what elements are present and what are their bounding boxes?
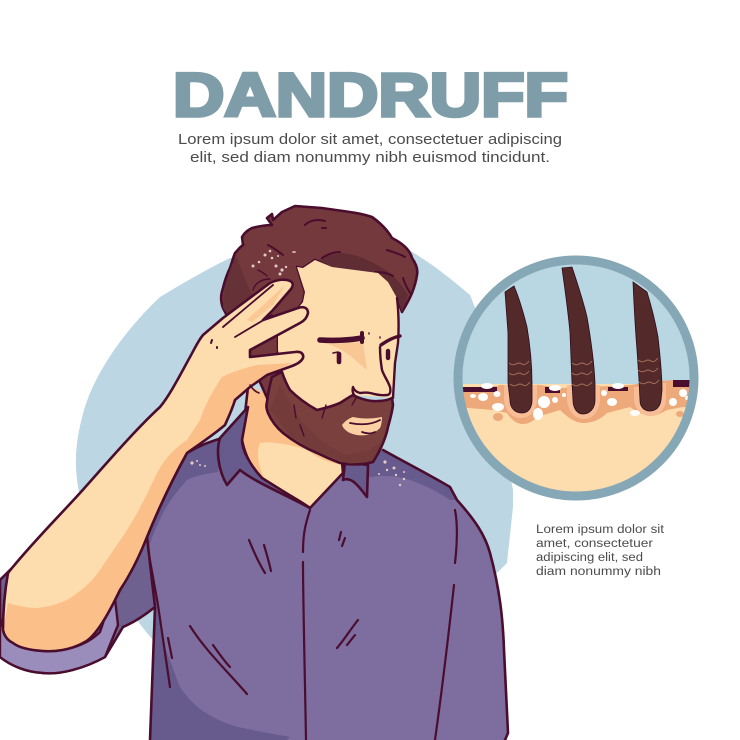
subtitle: Lorem ipsum dolor sit amet, consectetuer adipiscing [178,132,562,148]
caption text: diam nonummy nibh [536,566,661,578]
caption text: adipiscing elit, sed [536,552,643,564]
left collar [218,407,310,508]
nose [353,347,390,396]
skin layers [462,384,686,492]
face [278,260,399,410]
background blob [76,247,513,640]
subtitle [178,132,562,166]
dandruff flakes [190,250,405,486]
hair strand lines [253,220,410,293]
rolled sleeve [0,537,155,673]
hair [221,206,417,400]
beard stubble marks [294,398,356,436]
magnified scalp circle [450,260,700,504]
follicle light rims [504,383,666,419]
subtitle: elit, sed diam nonummy nibh euismod tincidunt. [190,150,550,166]
brows and eyes [320,333,400,362]
caption text [536,524,665,578]
neck [242,385,345,508]
placket and folds [149,510,457,740]
beard [266,372,393,464]
raised arm and hand [3,280,308,651]
hair shafts [505,267,662,414]
man with dandruff [0,206,508,740]
title: DANDRUFF [173,61,568,129]
mouth [342,417,382,435]
finger highlight [247,285,285,322]
right collar [343,462,368,497]
shirt [147,407,508,740]
hair wave marks [509,358,659,386]
sleeve cuff [0,590,118,673]
epidermis dark line [455,380,700,393]
caption text: amet, consectetuer [536,538,653,550]
caption text: Lorem ipsum dolor sit [536,524,665,536]
lens ring [458,260,694,496]
flakes [470,383,689,420]
